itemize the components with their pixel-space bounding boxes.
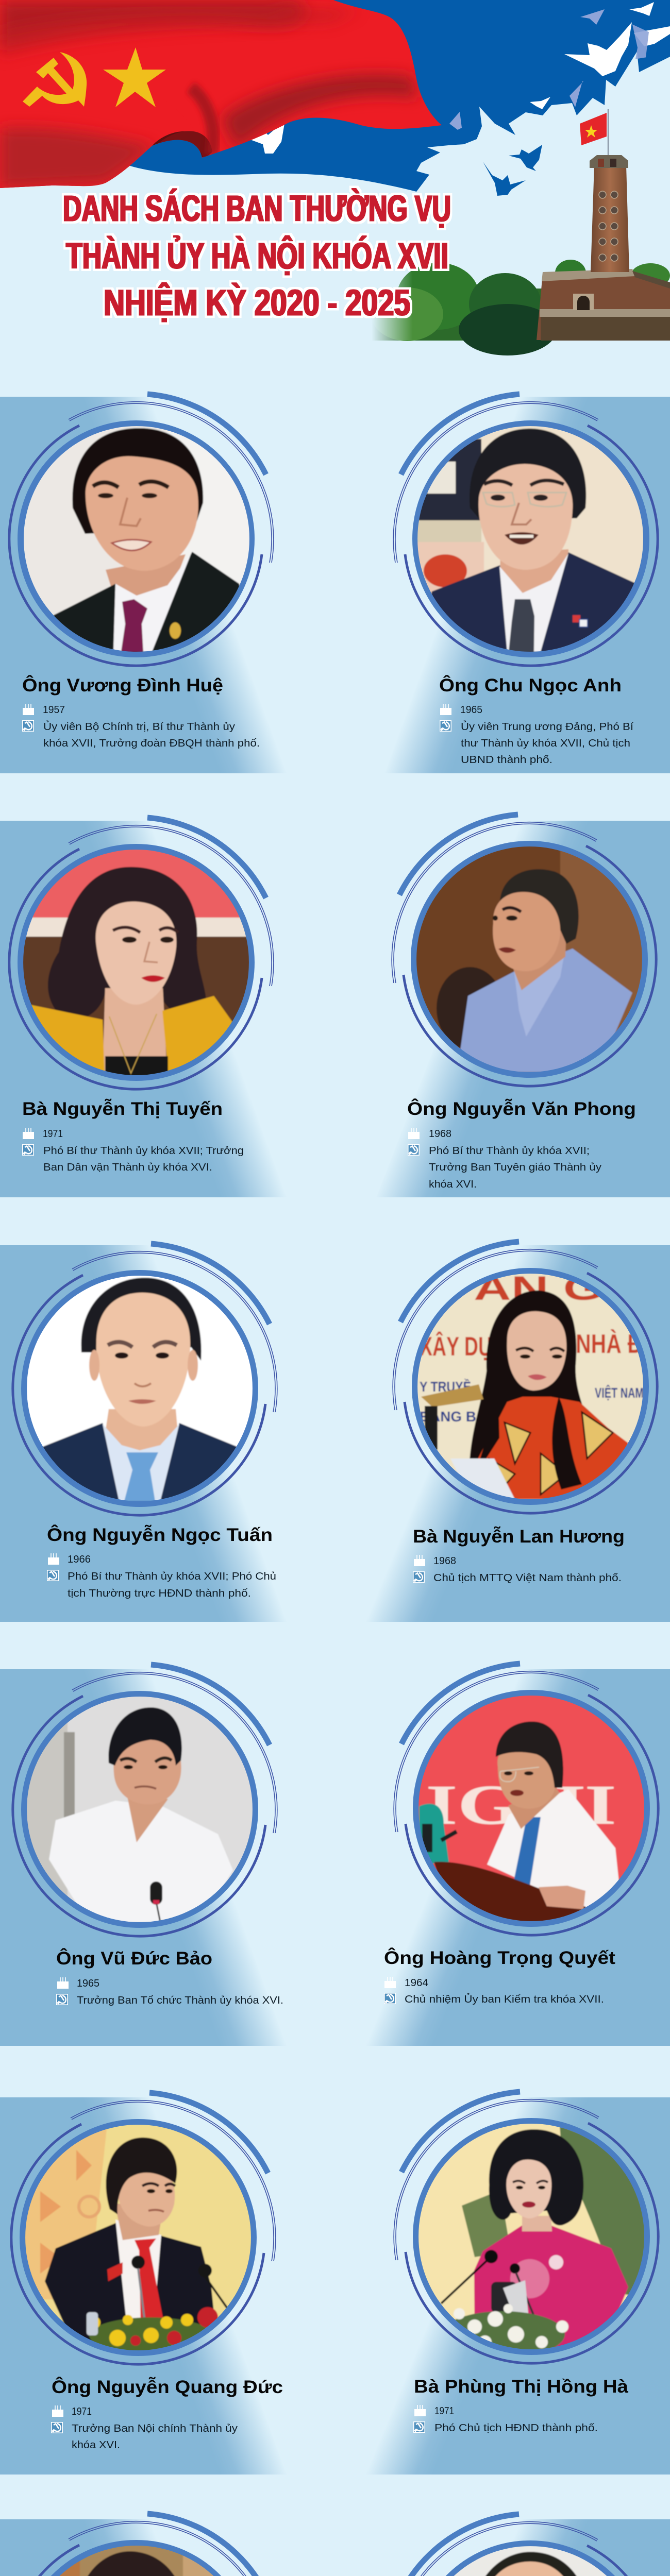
icon: birth year bbox=[48, 1553, 59, 1565]
position: Phó Bí thư Thành ủy khóa XVII; Trưởng bbox=[43, 1145, 244, 1157]
position: Trưởng Ban Tuyên giáo Thành ủy bbox=[429, 1161, 602, 1173]
name: Ông Vũ Đức Bảo bbox=[56, 1948, 212, 1969]
icon: yellow star bbox=[103, 47, 166, 107]
panel background bbox=[0, 397, 287, 773]
name: Ông Vương Đình Huệ bbox=[22, 675, 223, 696]
portrait photo: IGHI bbox=[426, 1773, 616, 1836]
icon: party bbox=[440, 721, 451, 731]
portrait photo: AN GI bbox=[474, 1269, 618, 1307]
birth year: 1968 bbox=[429, 1128, 451, 1140]
icon: birth year bbox=[23, 1128, 34, 1139]
trees bbox=[371, 260, 670, 355]
position: khóa XVI. bbox=[429, 1178, 477, 1190]
portrait photo: Y TRUYỀ bbox=[420, 1379, 471, 1395]
panel: Ông Chu Ngọc Anh bbox=[384, 394, 670, 773]
panel background bbox=[0, 821, 287, 1197]
birth year: 1971 bbox=[72, 2405, 92, 2417]
position: Phó Bí thư Thành ủy khóa XVII; bbox=[429, 1145, 590, 1157]
portrait photo bbox=[417, 426, 649, 652]
icon: birth year bbox=[23, 704, 34, 715]
icon: birth year bbox=[414, 1555, 425, 1566]
birth year: 1965 bbox=[460, 704, 482, 716]
portrait photo bbox=[23, 426, 255, 652]
icon: birth year bbox=[414, 2405, 426, 2416]
portrait photo: ĐẢNG B bbox=[420, 1408, 476, 1425]
portrait photo bbox=[414, 2546, 646, 2576]
icon: party bbox=[408, 1145, 419, 1155]
panel: Ông Nguyễn Ngọc Tuấn bbox=[0, 1244, 287, 1622]
panel: Bà Phùng Thị Hồng Hà bbox=[365, 2092, 670, 2475]
portrait rings bbox=[392, 815, 656, 1086]
position: Ủy viên Trung ương Đảng, Phó Bí bbox=[461, 720, 633, 733]
panel background bbox=[367, 2519, 670, 2576]
panel background bbox=[365, 1669, 670, 2046]
lilac doves bbox=[449, 9, 649, 130]
portrait photo bbox=[26, 1696, 253, 1923]
portrait rings bbox=[9, 2514, 274, 2576]
name: Ông Hoàng Trọng Quyết bbox=[384, 1947, 615, 1968]
position: Chủ nhiệm Ủy ban Kiểm tra khóa XVII. bbox=[405, 1993, 604, 2005]
birth year: 1957 bbox=[43, 704, 65, 716]
icon: hammer and sickle bbox=[23, 52, 87, 107]
name: Bà Nguyễn Lan Hương bbox=[413, 1526, 625, 1547]
portrait rings bbox=[9, 818, 274, 1089]
panel background bbox=[0, 2097, 287, 2475]
name: Ông Nguyễn Văn Phong bbox=[407, 1098, 636, 1119]
title: NHIỆM KỲ 2020 - 2025 bbox=[104, 282, 410, 324]
birth year: 1971 bbox=[43, 1128, 63, 1140]
panel background bbox=[384, 397, 670, 773]
panel: Ông Nguyễn Doãn Toản bbox=[367, 2514, 670, 2576]
position bbox=[429, 1145, 602, 1190]
birth year: 1971 bbox=[434, 2405, 454, 2417]
icon: birth year bbox=[408, 1128, 420, 1139]
panel: Bà Nguyễn Thị Tuyến bbox=[0, 818, 287, 1197]
icon: birth year bbox=[384, 1977, 396, 1988]
name: Ông Chu Ngọc Anh bbox=[439, 675, 622, 696]
icon: party bbox=[413, 1572, 424, 1582]
portrait photo bbox=[417, 1269, 644, 1500]
position: Phó Chủ tịch HĐND thành phố. bbox=[434, 2422, 598, 2434]
panel: Ông Vũ Đức Bảo bbox=[0, 1665, 287, 2046]
panel background bbox=[365, 1245, 670, 1622]
position bbox=[72, 2422, 238, 2451]
portrait rings bbox=[9, 394, 274, 666]
name: Ông Nguyễn Quang Đức bbox=[52, 2377, 283, 2397]
portrait rings bbox=[393, 2514, 657, 2576]
name: Ông Nguyễn Ngọc Tuấn bbox=[47, 1524, 273, 1545]
panel background bbox=[0, 1245, 287, 1622]
position: khóa XVI. bbox=[72, 2439, 120, 2451]
portrait photo bbox=[23, 2545, 250, 2576]
panel: Bà Nguyễn Lan Hương bbox=[365, 1242, 670, 1622]
name: Bà Phùng Thị Hồng Hà bbox=[414, 2377, 629, 2397]
position: khóa XVII, Trưởng đoàn ĐBQH thành phố. bbox=[43, 737, 260, 749]
header illustration bbox=[0, 0, 670, 355]
position: thư Thành ủy khóa XVII, Chủ tịch bbox=[461, 737, 630, 749]
white doves on ribbon bbox=[243, 2, 670, 154]
red party flag bbox=[0, 0, 454, 196]
position: Phó Bí thư Thành ủy khóa XVII; Phó Chủ bbox=[68, 1570, 276, 1582]
portrait rings bbox=[394, 1664, 658, 1935]
Hanoi flag tower bbox=[537, 109, 670, 341]
title: THÀNH ỦY HÀ NỘI KHÓA XVII bbox=[66, 235, 448, 277]
position bbox=[68, 1570, 276, 1599]
position: Trưởng Ban Nội chính Thành ủy bbox=[72, 2422, 238, 2434]
panel background bbox=[376, 821, 670, 1197]
birth year: 1968 bbox=[433, 1555, 456, 1567]
blue doves below ribbon bbox=[483, 145, 542, 196]
portrait rings bbox=[11, 2093, 276, 2364]
blue ribbon with dissolving doves bbox=[128, 0, 670, 192]
portrait photo bbox=[24, 1275, 256, 1502]
portrait photo bbox=[418, 1695, 645, 1922]
position: Chủ tịch MTTQ Việt Nam thành phố. bbox=[433, 1572, 622, 1584]
portrait photo bbox=[418, 2123, 647, 2358]
title bbox=[63, 189, 451, 324]
birth year: 1966 bbox=[68, 1553, 91, 1565]
portrait photo: VIỆT NAM bbox=[595, 1385, 644, 1401]
portrait photo bbox=[25, 2124, 252, 2353]
portrait photo bbox=[416, 846, 643, 1073]
panel background bbox=[0, 2519, 287, 2576]
portrait rings bbox=[13, 1244, 277, 1515]
panel: Bà Bùi Huyền Mai bbox=[0, 2514, 287, 2576]
name: Bà Nguyễn Thị Tuyến bbox=[22, 1098, 223, 1119]
portrait rings bbox=[393, 1242, 657, 1513]
icon: party bbox=[384, 1993, 395, 2004]
position: Ban Dân vận Thành ủy khóa XVI. bbox=[43, 1161, 212, 1173]
icon: birth year bbox=[52, 2405, 63, 2417]
position: tịch Thường trực HĐND thành phố. bbox=[68, 1587, 251, 1599]
position: Trưởng Ban Tổ chức Thành ủy khóa XVI. bbox=[77, 1994, 283, 2006]
position bbox=[43, 1145, 244, 1173]
portrait photo bbox=[23, 849, 249, 1077]
position bbox=[43, 720, 260, 749]
portrait photo: XÂY DỰ bbox=[420, 1331, 495, 1362]
panel background bbox=[365, 2097, 670, 2475]
portrait rings bbox=[394, 2092, 658, 2363]
position bbox=[461, 720, 633, 766]
panel: Ông Nguyễn Văn Phong bbox=[376, 815, 670, 1197]
panel: Ông Nguyễn Quang Đức bbox=[0, 2093, 287, 2475]
icon: birth year bbox=[440, 704, 451, 715]
panel: Ông Hoàng Trọng Quyết bbox=[365, 1664, 670, 2046]
position: UBND thành phố. bbox=[461, 754, 552, 766]
birth year: 1964 bbox=[405, 1977, 428, 1989]
icon: party bbox=[52, 2422, 62, 2433]
icon: party bbox=[23, 721, 34, 731]
panel: Ông Vương Đình Huệ bbox=[0, 394, 287, 773]
panel background bbox=[0, 1669, 287, 2046]
icon: party bbox=[23, 1145, 34, 1155]
title: DANH SÁCH BAN THƯỜNG VỤ bbox=[63, 189, 451, 229]
icon: party bbox=[47, 1570, 58, 1581]
portrait photo: NHÀ Đ bbox=[576, 1329, 643, 1359]
position: Ủy viên Bộ Chính trị, Bí thư Thành ủy bbox=[43, 720, 236, 733]
icon: birth year bbox=[57, 1977, 69, 1989]
icon: party bbox=[414, 2422, 425, 2432]
portrait rings bbox=[393, 394, 658, 666]
birth year: 1965 bbox=[77, 1977, 99, 1989]
icon: party bbox=[57, 1994, 68, 2005]
portrait rings bbox=[13, 1665, 277, 1936]
